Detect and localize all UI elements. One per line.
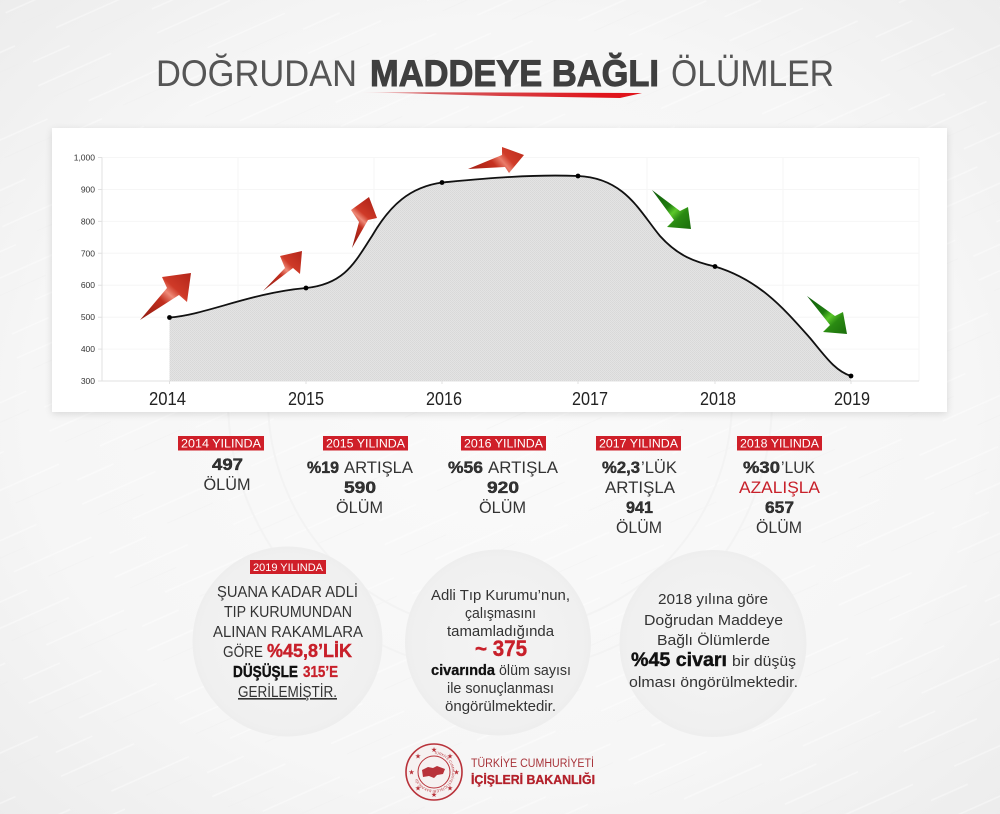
logo: ministry emblem: ★ (408, 768, 415, 776)
block: 2015: ÖLÜM (336, 498, 383, 517)
text: forecast body: öngörülmektedir. (445, 698, 556, 715)
block: 2016 (448, 436, 559, 517)
text: forecast body: ile sonuçlanması (447, 680, 554, 697)
logo: ministry emblem: ★ (447, 784, 453, 792)
y axis labels: 800 (81, 216, 95, 226)
logo: ministry emblem: ★ (415, 784, 421, 792)
arrow: up 2014-2015 (140, 273, 191, 320)
block: 2018: ’LUK (781, 458, 816, 477)
block: 2017: 2017 YILINDA (599, 436, 678, 450)
text: forecast body: ölüm sayısı (499, 662, 571, 679)
block: 2014: 2014 YILINDA (181, 436, 261, 450)
y axis labels: 400 (81, 344, 95, 354)
text: 2019 body (213, 582, 363, 701)
block: 2017: 941 (626, 498, 653, 517)
panel: line chart (52, 128, 947, 412)
arrow: up 2015 (263, 251, 302, 291)
block: 2016: %56 (448, 458, 483, 477)
arrow: up 2015-2016 (351, 197, 377, 248)
logo: ministry emblem: ★ (447, 752, 453, 760)
text: comparison body: 2018 yılına göre (658, 591, 768, 608)
arrow: down 2018-2019 (807, 296, 847, 334)
data points (167, 174, 853, 378)
text: forecast body: civarında (431, 662, 496, 679)
x axis years: 2019 (834, 389, 870, 409)
x axis years: 2017 (572, 389, 608, 409)
text: 2019 body: GERİLEMİŞTİR. (238, 682, 337, 701)
text: comparison body: olması öngörülmektedir. (629, 674, 798, 691)
block: 2017: %2,3 (602, 458, 640, 477)
y axis labels (74, 152, 95, 386)
block: 2018: 657 (765, 498, 794, 517)
y axis labels: 1,000 (74, 152, 95, 162)
text: forecast body: Adli Tıp Kurumu’nun, (431, 587, 570, 604)
panel: 2018 comparison circle (620, 550, 806, 737)
logo: ministry emblem: ★ (431, 746, 437, 754)
title underline swoosh (358, 92, 642, 98)
text: comparison body: Bağlı Ölümlerde (657, 631, 770, 649)
block: 2015: ARTIŞLA (344, 458, 414, 477)
block: 2018 (737, 436, 822, 537)
panel shadow (52, 130, 947, 414)
x axis years: 2015 (288, 389, 324, 409)
x axis years: 2016 (426, 389, 462, 409)
line curve (170, 176, 851, 376)
text: 2019 body: ALINAN RAKAMLARA (213, 624, 363, 641)
tag: 2019: 2019 YILINDA (253, 562, 324, 574)
y axis labels: 500 (81, 312, 95, 322)
logo: ministry name (471, 757, 595, 787)
arrow: up 2016-2017 (468, 147, 524, 173)
logo: ministry emblem: TÜRKİYE CUMHURİYETİ İÇİŞLERİ BAKANLIĞI (415, 751, 454, 794)
text: forecast body: tamamladığında (447, 623, 555, 640)
text: forecast body (431, 587, 571, 715)
block: 2016: ÖLÜM (479, 498, 526, 517)
title: DOĞRUDAN (156, 53, 357, 94)
x axis years: 2014 (149, 389, 186, 409)
block: 2016: 920 (487, 478, 519, 497)
block: 2016: 2016 YILINDA (464, 436, 543, 450)
title: MADDEYE BAĞLI (370, 53, 659, 94)
block: 2016: ARTIŞLA (488, 458, 559, 477)
text: forecast body: çalışmasını (465, 605, 536, 622)
text: comparison body: %45 civarı (631, 650, 727, 671)
y axis labels: 600 (81, 280, 95, 290)
title (156, 53, 834, 94)
block: 2014: 497 (212, 455, 243, 474)
logo: ministry name: İÇİŞLERİ BAKANLIĞI (471, 772, 595, 787)
block: 2018: 2018 YILINDA (740, 436, 819, 450)
block: 2018: ÖLÜM (756, 518, 802, 537)
x axis years (149, 389, 870, 409)
block: 2015: %19 (307, 458, 339, 477)
block: 2018: %30 (743, 458, 780, 477)
block: 2014: ÖLÜM (204, 475, 250, 494)
text: forecast body: ~ 375 (475, 636, 527, 661)
arrow: down 2017-2018 (652, 190, 691, 229)
logo: ministry emblem: ★ (453, 768, 460, 776)
logo: ministry emblem (405, 743, 463, 801)
area fill (170, 176, 851, 381)
y axis labels: 300 (81, 376, 95, 386)
text: 2019 body: DÜŞÜŞLE (233, 662, 298, 681)
block: 2017 (596, 436, 681, 537)
text: 2019 body: TIP KURUMUNDAN (224, 604, 352, 621)
block: 2014 (178, 436, 264, 494)
block: 2015: 590 (344, 478, 376, 497)
block: 2018: AZALIŞLA (739, 478, 821, 497)
logo: ministry emblem: ★ (431, 791, 437, 799)
text: 2019 body: GÖRE (223, 643, 263, 661)
chart axes (98, 158, 919, 384)
text: 2019 body: 315’E (303, 664, 338, 681)
text: 2019 body: %45,8’LİK (267, 641, 352, 661)
logo: ministry emblem: ★ (415, 752, 421, 760)
block: 2017: ÖLÜM (616, 518, 662, 537)
text: comparison body: bir düşüş (732, 653, 796, 670)
text: 2019 body: ŞUANA KADAR ADLİ (217, 582, 358, 601)
panel: 2019 circle (192, 546, 382, 736)
panel: forecast circle (405, 550, 591, 736)
block: 2015 (307, 436, 414, 517)
block: 2017: ARTIŞLA (605, 478, 676, 497)
text: comparison body: Doğrudan Maddeye (644, 612, 783, 629)
title: ÖLÜMLER (671, 53, 834, 94)
y axis labels: 700 (81, 248, 95, 258)
logo: ministry name: TÜRKİYE CUMHURİYETİ (471, 757, 594, 770)
block: 2015: 2015 YILINDA (326, 436, 405, 450)
text: comparison body (629, 591, 798, 691)
y axis labels: 900 (81, 184, 95, 194)
x axis years: 2018 (700, 389, 736, 409)
block: 2017: ’LÜK (641, 458, 678, 477)
